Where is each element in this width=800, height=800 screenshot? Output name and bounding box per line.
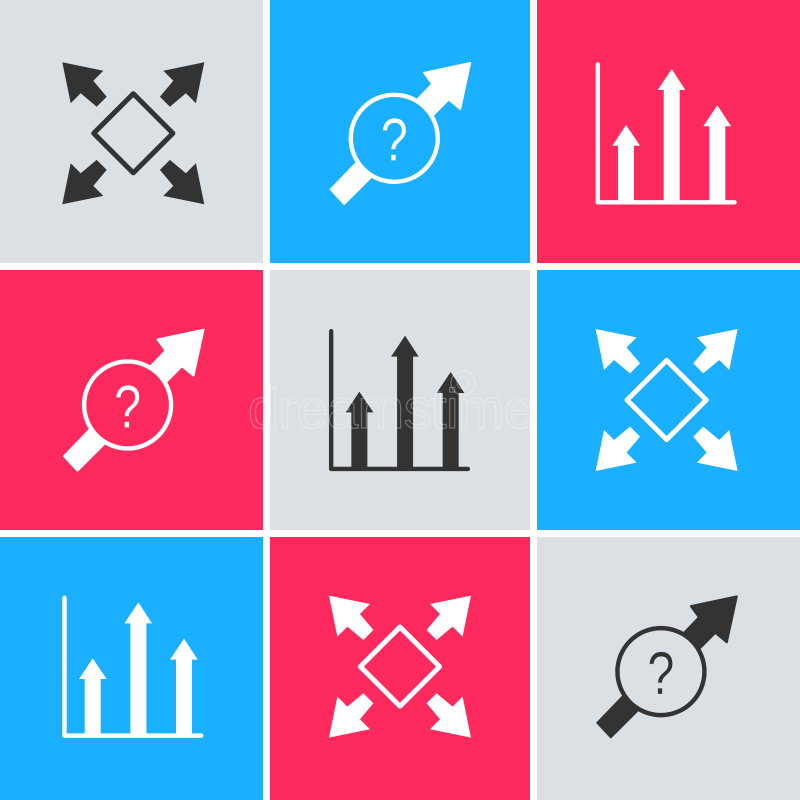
icon: diamond with four outward arrows <box>62 62 204 204</box>
icon: chart with three up arrows <box>331 331 468 470</box>
icon: circle with question mark on diagonal arrow: ? <box>114 373 141 440</box>
panel: bar chart, pink <box>537 0 800 263</box>
panel: expand arrows, grey <box>0 0 263 263</box>
panel: expand arrows, blue <box>537 270 800 530</box>
panel: bar chart, grey <box>270 270 530 530</box>
icon: chart with three up arrows <box>598 64 735 203</box>
icon: diamond with four outward arrows <box>596 329 738 471</box>
panel: question arrow, blue <box>270 0 530 263</box>
panel: expand arrows, pink <box>270 537 530 800</box>
watermark: dreamstime <box>248 377 535 440</box>
panel: question arrow, grey <box>537 537 800 800</box>
icon: circle with question mark on diagonal arrow: ? <box>381 107 408 174</box>
icon: circle with question mark on diagonal arrow: ? <box>647 640 674 707</box>
icon: circle with question mark on diagonal arrow <box>64 330 204 471</box>
icon: circle with question mark on diagonal arrow <box>331 63 470 204</box>
panel: question arrow, pink <box>0 270 263 530</box>
icon: diamond with four outward arrows <box>329 596 471 738</box>
icon: circle with question mark on diagonal arrow <box>597 596 737 737</box>
panel: bar chart, blue <box>0 537 263 800</box>
icon: chart with three up arrows <box>64 598 201 736</box>
